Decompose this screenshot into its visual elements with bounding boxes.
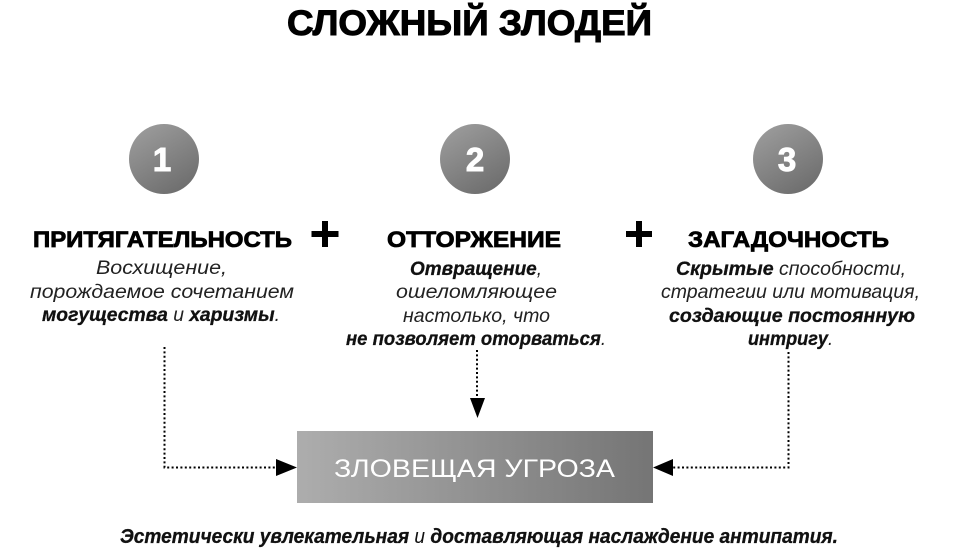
heading: mystery: ЗАГАДОЧНОСТЬ — [688, 227, 889, 252]
number badge 2: 2 — [466, 141, 484, 178]
text block: repulsion description: Отвращение, — [410, 258, 542, 280]
panel: repulsion — [346, 124, 606, 350]
title: СЛОЖНЫЙ ЗЛОДЕЙ — [287, 3, 652, 43]
text block: attraction description: Восхищение, — [96, 257, 227, 279]
panel: mystery — [661, 124, 920, 350]
text block: repulsion description: не позволяет оторваться. — [346, 328, 615, 350]
result box: sinister threat: ЗЛОВЕЩАЯ УГРОЗА — [334, 455, 615, 483]
plus sign 2 — [626, 221, 652, 247]
number badge 1: 1 — [153, 141, 171, 178]
panel: attraction — [30, 124, 294, 326]
caption: Эстетически увлекательная и доставляющая наслаждение антипатия. — [120, 526, 838, 548]
number badge 2 — [440, 124, 510, 194]
arrow: mystery to threat — [653, 352, 788, 476]
heading: repulsion: ОТТОРЖЕНИЕ — [387, 227, 561, 252]
text block: mystery description: создающие постоянную — [669, 305, 915, 327]
number badge 3: 3 — [778, 141, 796, 178]
text block: mystery description: Скрытые способности, — [676, 258, 906, 280]
text block: mystery description: интригу. — [748, 328, 834, 350]
arrow: repulsion to threat — [470, 350, 485, 418]
text block: attraction description: порождаемое сочетанием — [30, 281, 294, 303]
text block: mystery description: стратегии или мотивация, — [661, 281, 920, 303]
result box: sinister threat — [297, 431, 653, 503]
text block: repulsion description: ошеломляющее — [396, 281, 557, 303]
arrow: attraction to threat — [164, 347, 297, 476]
number badge 1 — [129, 124, 199, 194]
number badge 3 — [753, 124, 823, 194]
plus sign 1 — [312, 221, 338, 247]
text block: repulsion description: настолько, что — [403, 305, 550, 327]
heading: attraction: ПРИТЯГАТЕЛЬНОСТЬ — [33, 227, 292, 252]
text block: attraction description: могущества и харизмы. — [42, 304, 280, 326]
